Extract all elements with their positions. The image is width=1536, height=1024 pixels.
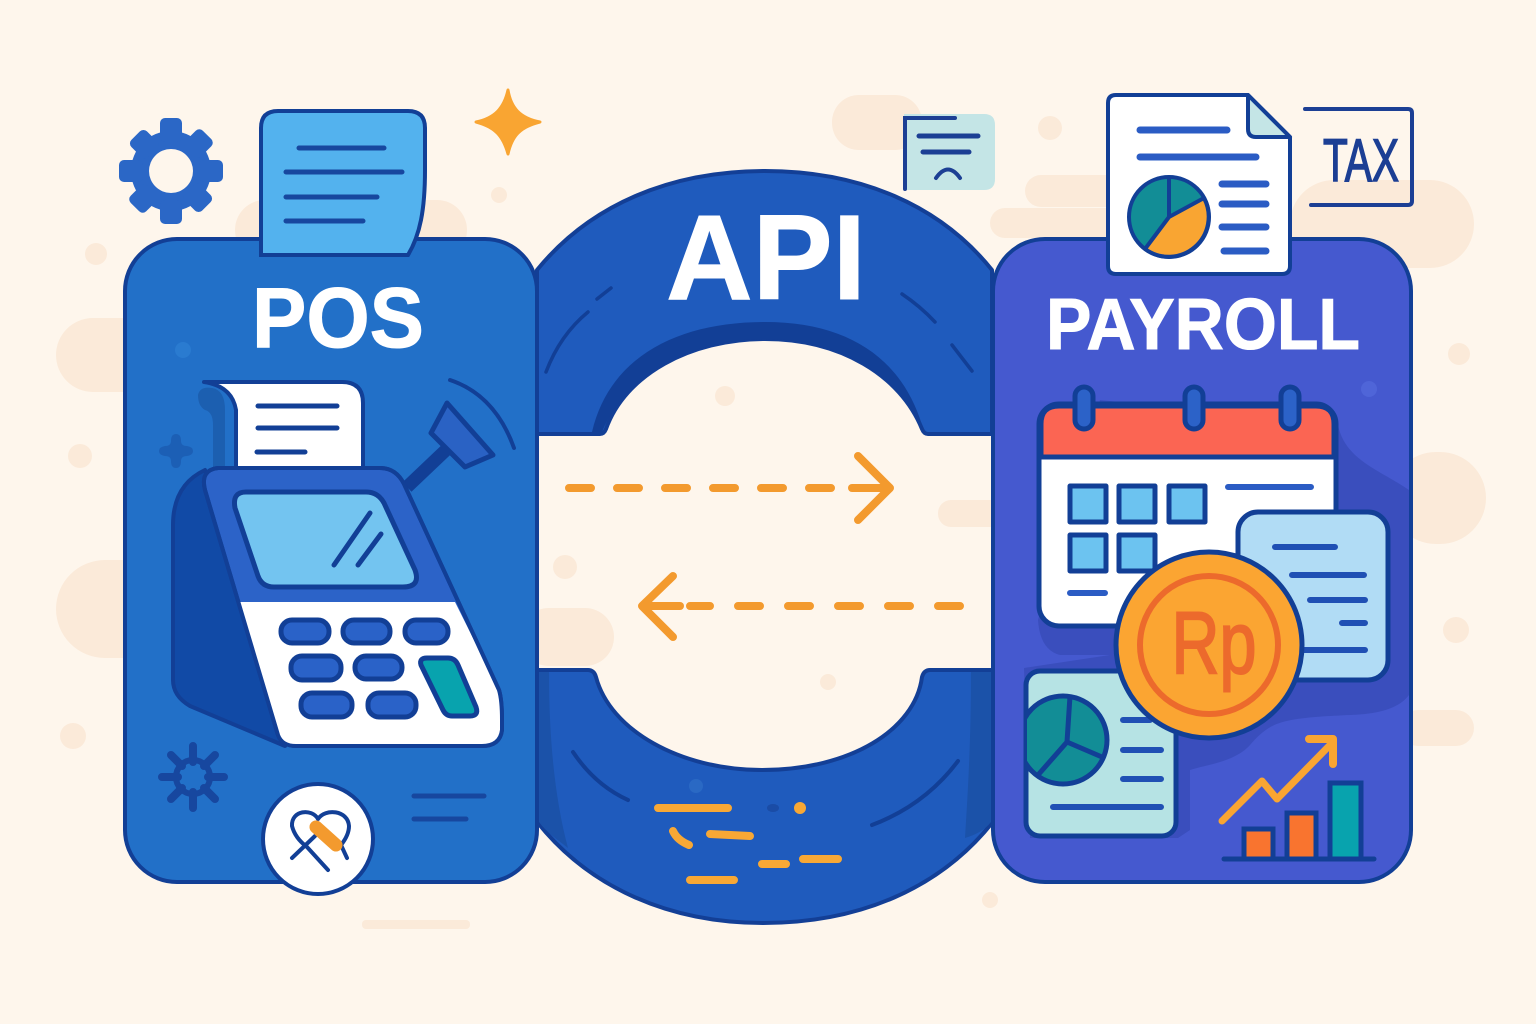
panel: Payroll bbox=[993, 95, 1411, 882]
icon: tax label bbox=[1305, 109, 1412, 205]
scanner bbox=[407, 380, 514, 487]
icon: POS top note bbox=[261, 111, 425, 255]
icon: sparkle bbox=[476, 90, 540, 154]
icon: tax label: TAX bbox=[1323, 127, 1399, 194]
heading: POS: POS bbox=[252, 271, 424, 366]
icon: rupiah coin bbox=[1116, 552, 1302, 738]
icon: chart card bbox=[1019, 671, 1176, 836]
icon: report document bbox=[1108, 95, 1290, 274]
icon: badge bbox=[263, 784, 373, 894]
receipt bbox=[198, 382, 363, 468]
panel: POS bbox=[125, 111, 537, 894]
bar chart bbox=[1222, 739, 1374, 859]
icon: small gear bbox=[162, 746, 224, 808]
icon: document card bbox=[1238, 512, 1388, 680]
text lines bbox=[414, 796, 484, 819]
terminal body bbox=[173, 470, 285, 746]
arrow: payroll to POS bbox=[642, 576, 960, 637]
heading: PAYROLL: PAYROLL bbox=[1046, 285, 1360, 365]
icon: gear top-left bbox=[100, 100, 242, 242]
icon: rupiah coin: Rp bbox=[1172, 593, 1256, 692]
heading: API: API bbox=[666, 189, 866, 325]
arrow: POS to payroll bbox=[569, 456, 890, 520]
icon: small document bbox=[904, 114, 995, 190]
decorative orange data dashes bbox=[658, 779, 838, 880]
panel: API connector ring bbox=[537, 171, 992, 923]
icon: calendar bbox=[1039, 387, 1336, 626]
illustration: POS terminal bbox=[173, 380, 514, 746]
icon: plus star bbox=[159, 434, 193, 468]
keypad bbox=[281, 620, 448, 717]
screen bbox=[234, 492, 416, 587]
